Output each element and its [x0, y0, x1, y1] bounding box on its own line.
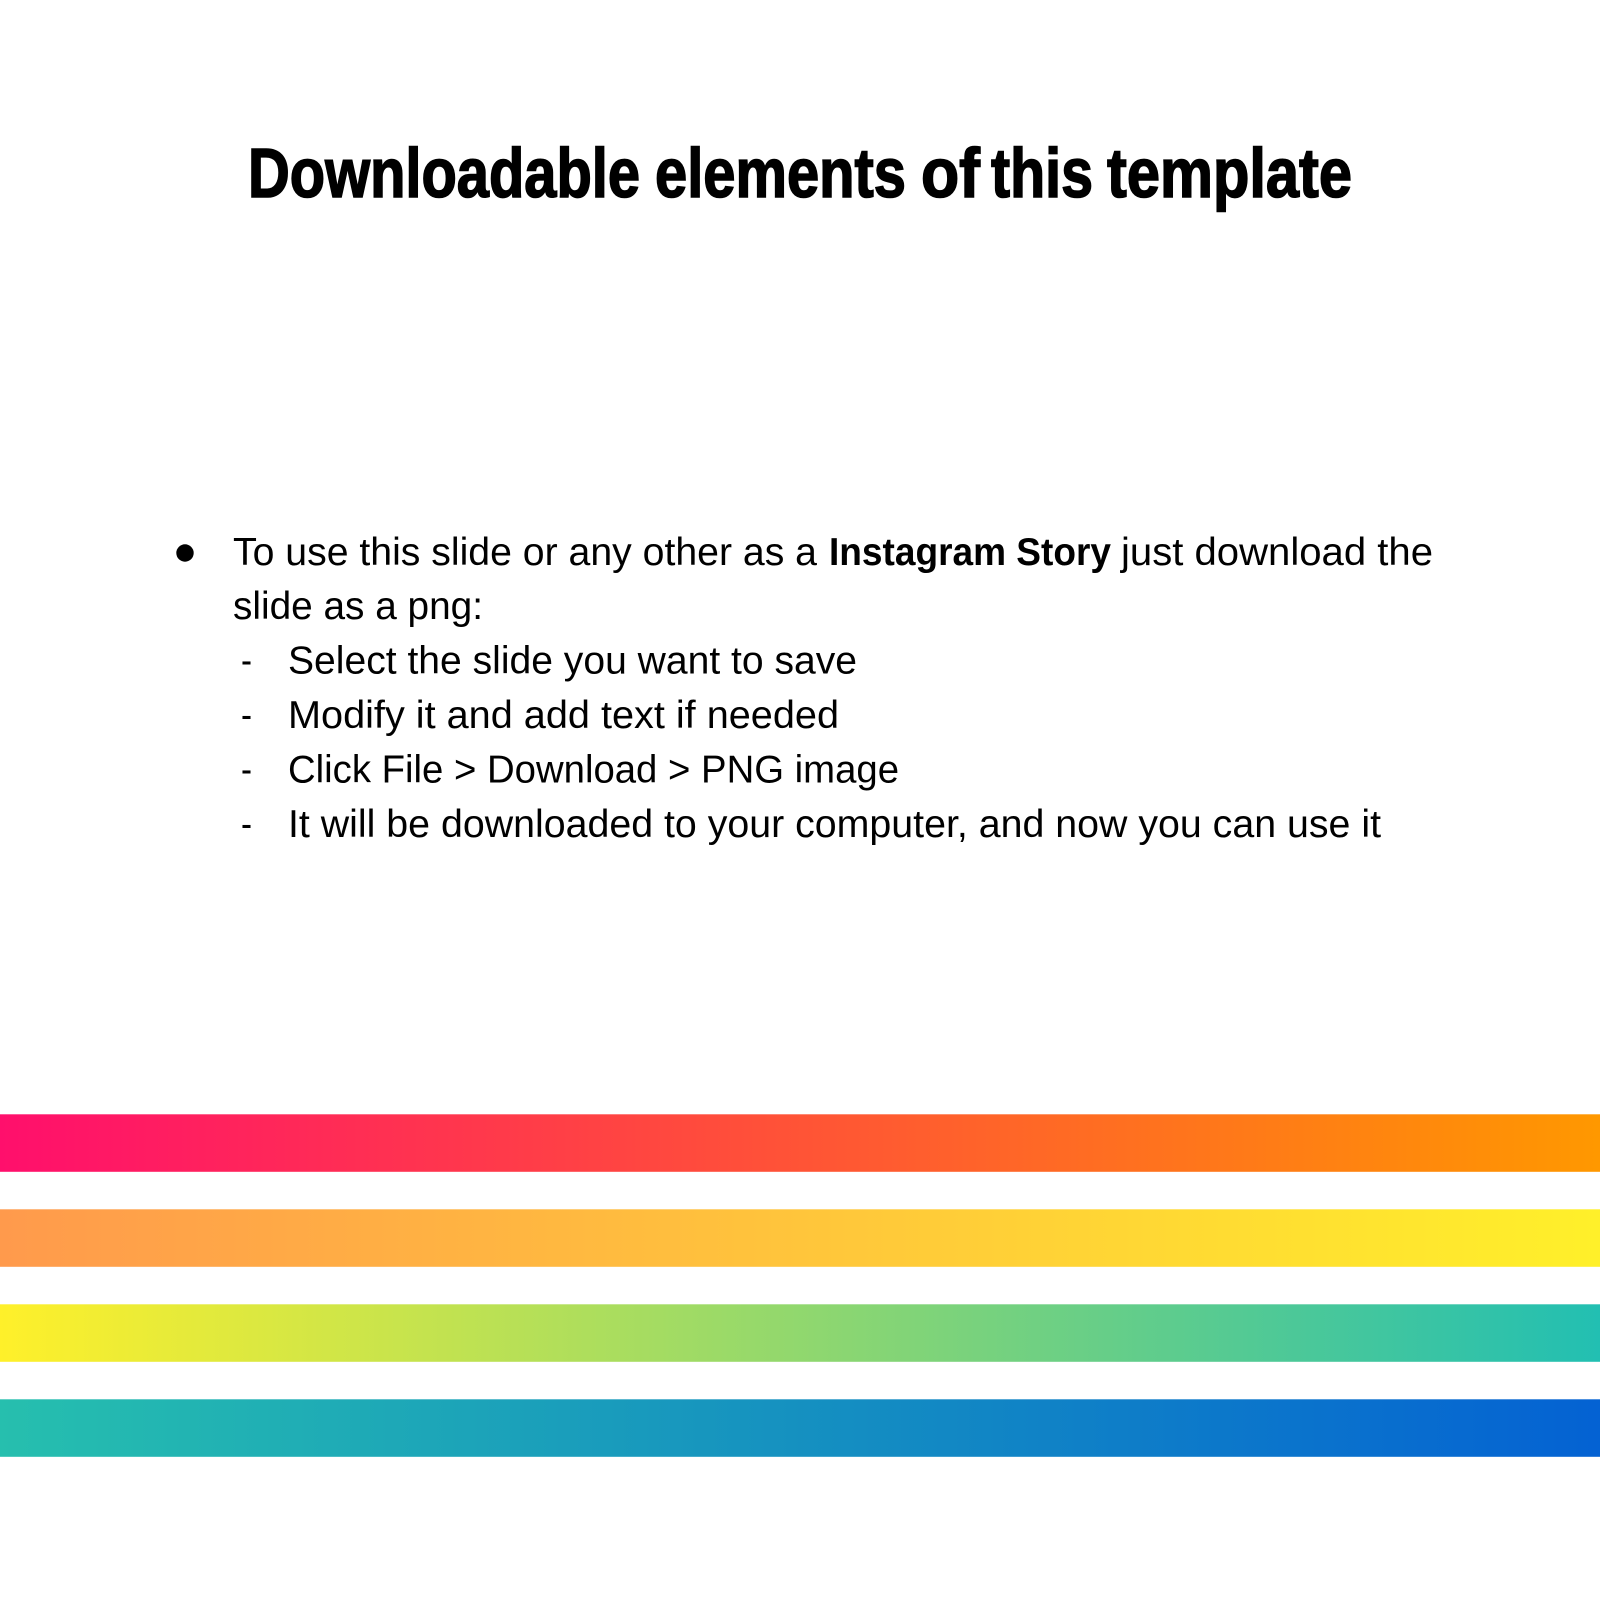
title: of: [921, 134, 981, 212]
gradient bar: yellow to teal: [0, 1304, 1600, 1362]
sub-step 2: Modify it and add text if needed: [288, 694, 839, 737]
sub-step 3: Click File > Download > PNG image: [288, 748, 899, 792]
text block: instructions: [176, 531, 1433, 846]
title: [248, 134, 1352, 212]
sub-step 2: -: [241, 694, 252, 737]
gradient bar: pink to orange: [0, 1114, 1600, 1172]
title: Downloadable: [248, 134, 640, 212]
sub-step 1: Select the slide you want to save: [288, 640, 857, 683]
sub-step 3: -: [241, 748, 252, 792]
title: this: [991, 134, 1093, 212]
sub-step 4: It will be downloaded to your computer, and now you can use it: [288, 803, 1381, 846]
title: template: [1107, 134, 1352, 212]
sub-step 1: -: [241, 640, 252, 683]
bullet text line 1: To use this slide or any other as a: [233, 531, 818, 574]
gradient bar: teal to blue: [0, 1399, 1600, 1457]
bullet text line 1: [233, 531, 1433, 574]
sub-step 4: -: [241, 803, 252, 846]
bullet text line 2: slide as a png:: [233, 585, 483, 628]
gradient bar: orange to yellow: [0, 1209, 1600, 1267]
bullet text line 1: Instagram Story: [829, 531, 1112, 574]
bullet text line 1: just download the: [1120, 531, 1433, 574]
bullet marker: [176, 544, 194, 562]
title: elements: [655, 134, 906, 212]
